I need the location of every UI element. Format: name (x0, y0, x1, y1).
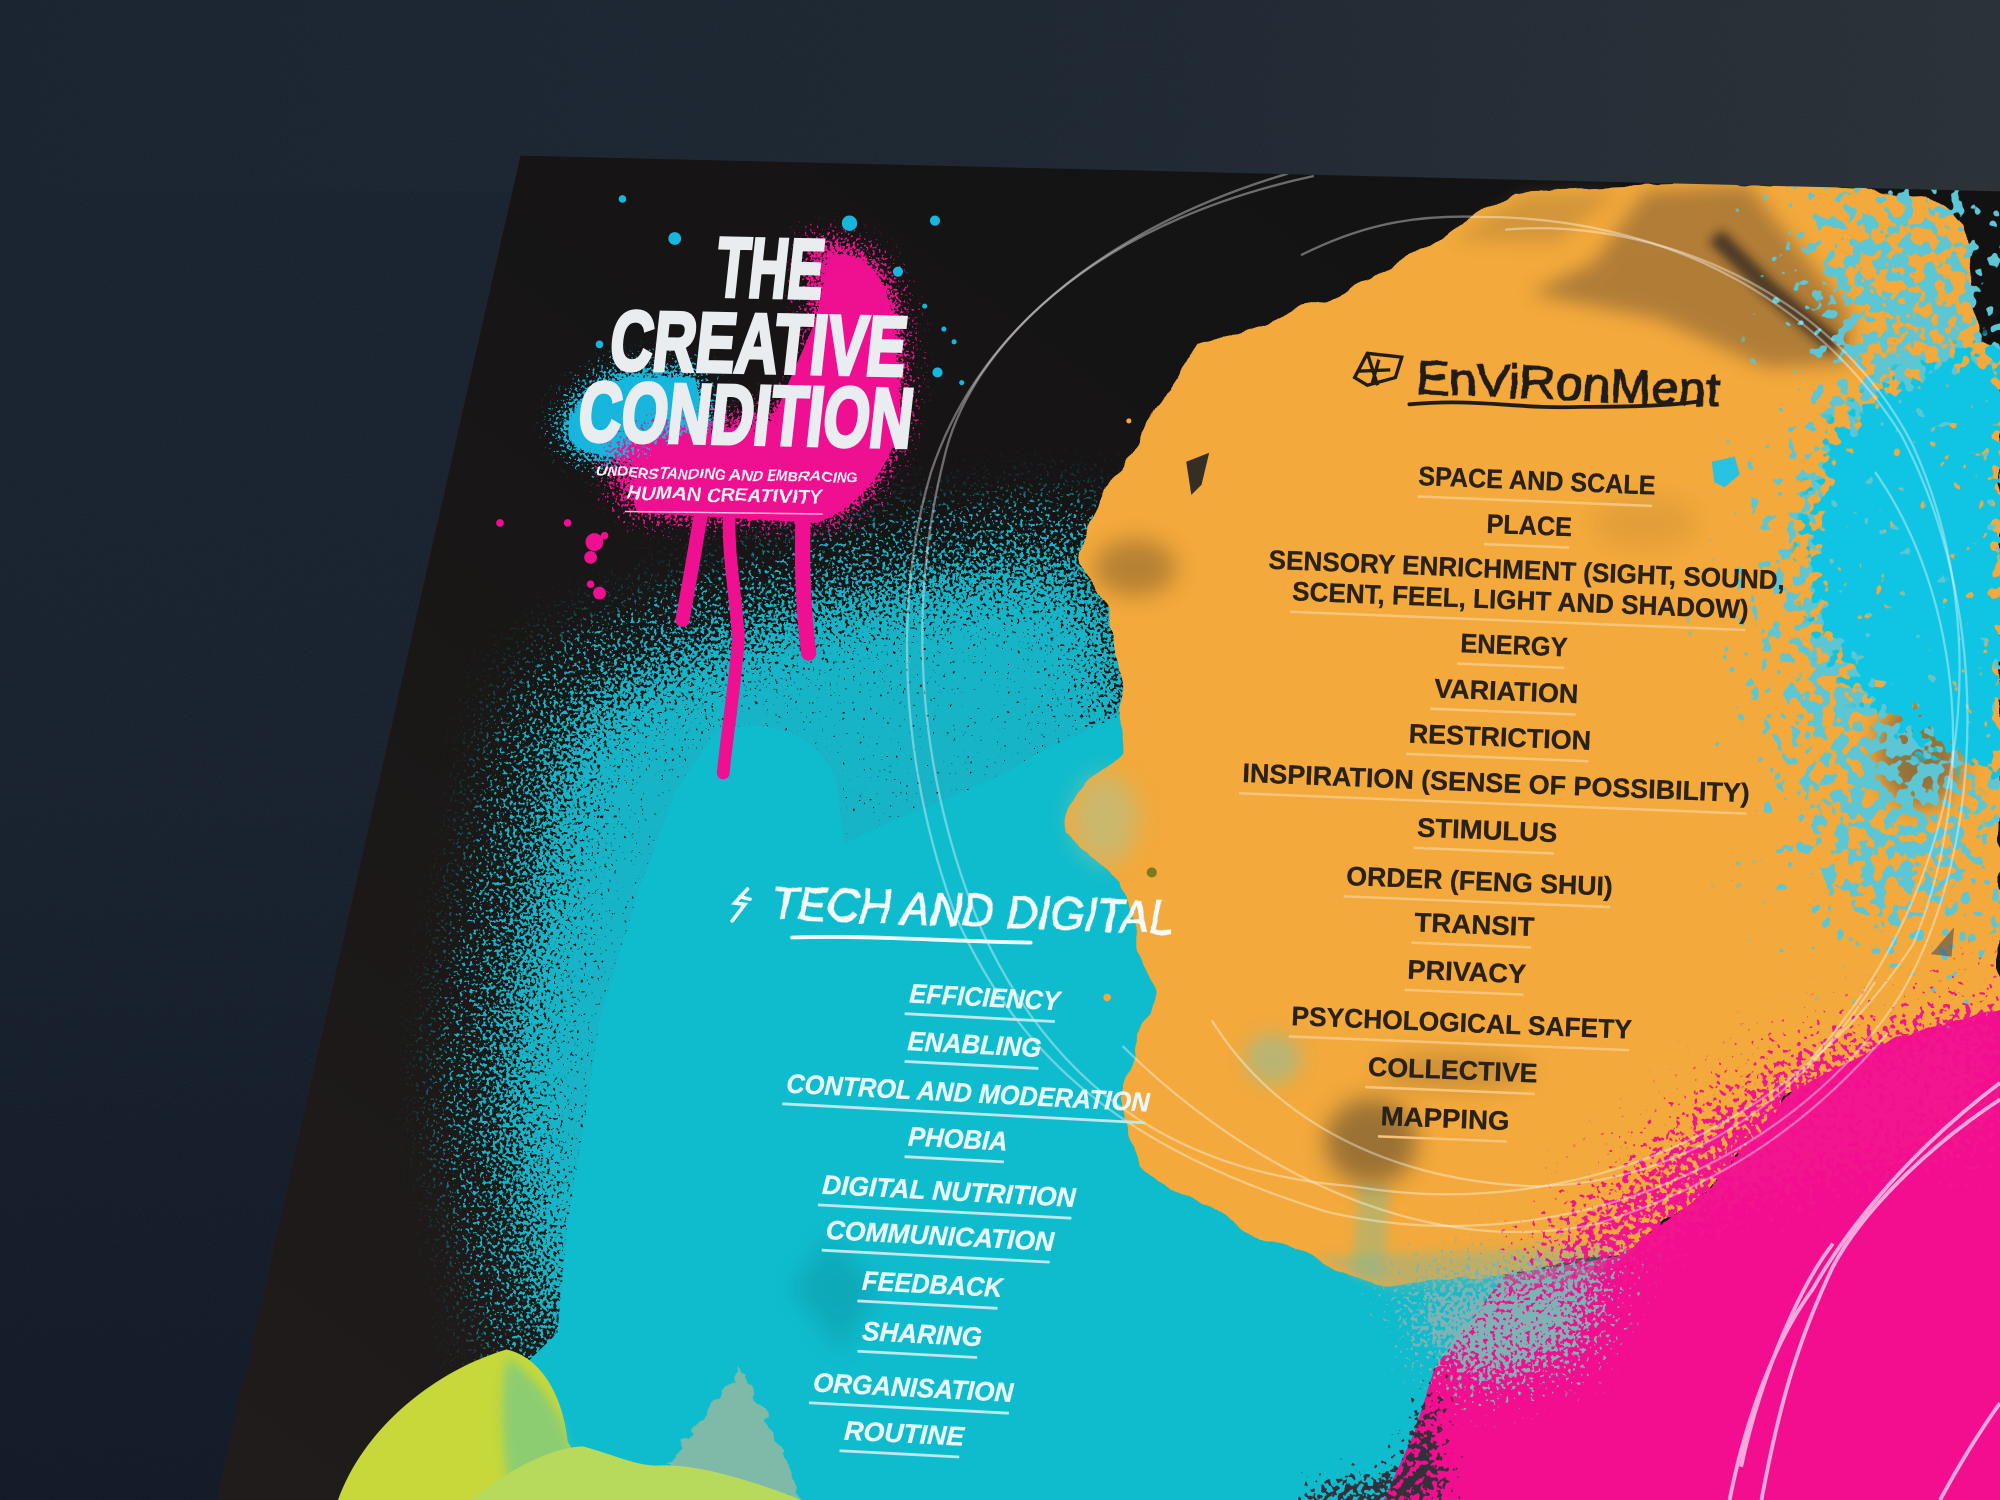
paint: cyan spray cloud (510, 561, 1148, 1352)
paint: magenta spray over orange (1492, 982, 2000, 1288)
solid magenta body (634, 254, 903, 523)
subtitle: HUMAN CREATIVITY (627, 483, 825, 509)
item: order: ORDER (FENG SHUI) (1346, 861, 1613, 902)
item: control and moderation: CONTROL AND MODERATION (786, 1069, 1151, 1118)
item: enabling: ENABLING (907, 1026, 1042, 1063)
list: environment factors (1239, 461, 1785, 1142)
drips (682, 508, 809, 773)
item: sensory enrichment (1267, 545, 1785, 631)
paint: solid cyan field (434, 714, 1505, 1500)
paint: solid cyan top right (1811, 347, 2000, 772)
item: mapping: MAPPING (1380, 1101, 1510, 1136)
artwork: paint layers (338, 173, 2000, 1500)
item: privacy: PRIVACY (1407, 954, 1527, 989)
item: feedback: FEEDBACK (861, 1266, 1005, 1303)
item: place: PLACE (1486, 509, 1573, 542)
item: stimulus: STIMULUS (1416, 812, 1558, 848)
paint: lime blob (338, 1349, 802, 1500)
item: collective: COLLECTIVE (1367, 1052, 1538, 1088)
subtitle (596, 464, 859, 509)
splash: cyan (559, 367, 721, 464)
list: tech and digital factors (782, 978, 1151, 1457)
item: psychological safety: PSYCHOLOGICAL SAFETY (1291, 1001, 1633, 1045)
item: organisation: ORGANISATION (812, 1367, 1015, 1408)
item: routine: ROUTINE (844, 1415, 966, 1452)
item: sensory enrichment: SCENT, FEEL, LIGHT AND SHADOW) (1292, 576, 1749, 625)
title: The Creative Condition (574, 220, 918, 465)
title: The Creative Condition: THE (712, 220, 829, 316)
poster sheet (217, 156, 2000, 1500)
item: energy: ENERGY (1460, 628, 1568, 662)
icon: environment cube (1355, 353, 1402, 385)
logo: spray splash (496, 195, 964, 773)
hand-drawn pink line loops (1730, 1083, 2000, 1500)
paint: dark smudges on orange (1094, 185, 1960, 1185)
paint: cyan speckles top right (1747, 179, 2000, 969)
subtitle: UNDERSTANDING AND EMBRACING (596, 464, 859, 487)
hand-drawn circle lines (907, 173, 1967, 1232)
item: inspiration: INSPIRATION (SENSE OF POSSIBILITY) (1242, 758, 1750, 808)
heading: Environment: EnViRonMent (1415, 351, 1721, 416)
item: sensory enrichment: SENSORY ENRICHMENT (SIGHT, SOUND, (1268, 545, 1785, 595)
ink flecks (791, 418, 1954, 1352)
paint: green tints on orange edge (1071, 773, 1633, 1291)
paint: dark speckles lower edge (1301, 1365, 1448, 1500)
paint: grey speckles at cyan and magenta edge (1390, 1256, 1620, 1390)
title: The Creative Condition: CREATIVE (606, 294, 912, 393)
heading: Tech and Digital: TECH AND DIGITAL (770, 876, 1175, 944)
item: variation: VARIATION (1434, 673, 1579, 709)
icon: tech lightning mark (732, 889, 750, 921)
paint splatter dots (496, 195, 964, 599)
item: phobia: PHOBIA (907, 1121, 1008, 1157)
item: restriction: RESTRICTION (1408, 719, 1592, 756)
logo underline (625, 511, 823, 514)
item: transit: TRANSIT (1414, 907, 1536, 942)
item: sharing: SHARING (861, 1316, 983, 1352)
title: The Creative Condition: CONDITION (574, 365, 918, 465)
item: communication: COMMUNICATION (825, 1215, 1055, 1257)
paint: magenta corner (1384, 982, 2000, 1500)
paint: orange mass (1065, 182, 2000, 1287)
item: digital nutrition: DIGITAL NUTRITION (821, 1170, 1077, 1213)
solid cyan body (568, 378, 708, 458)
item: efficiency: EFFICIENCY (909, 978, 1063, 1016)
item: space and scale: SPACE AND SCALE (1418, 461, 1656, 501)
splash: magenta (612, 240, 904, 520)
